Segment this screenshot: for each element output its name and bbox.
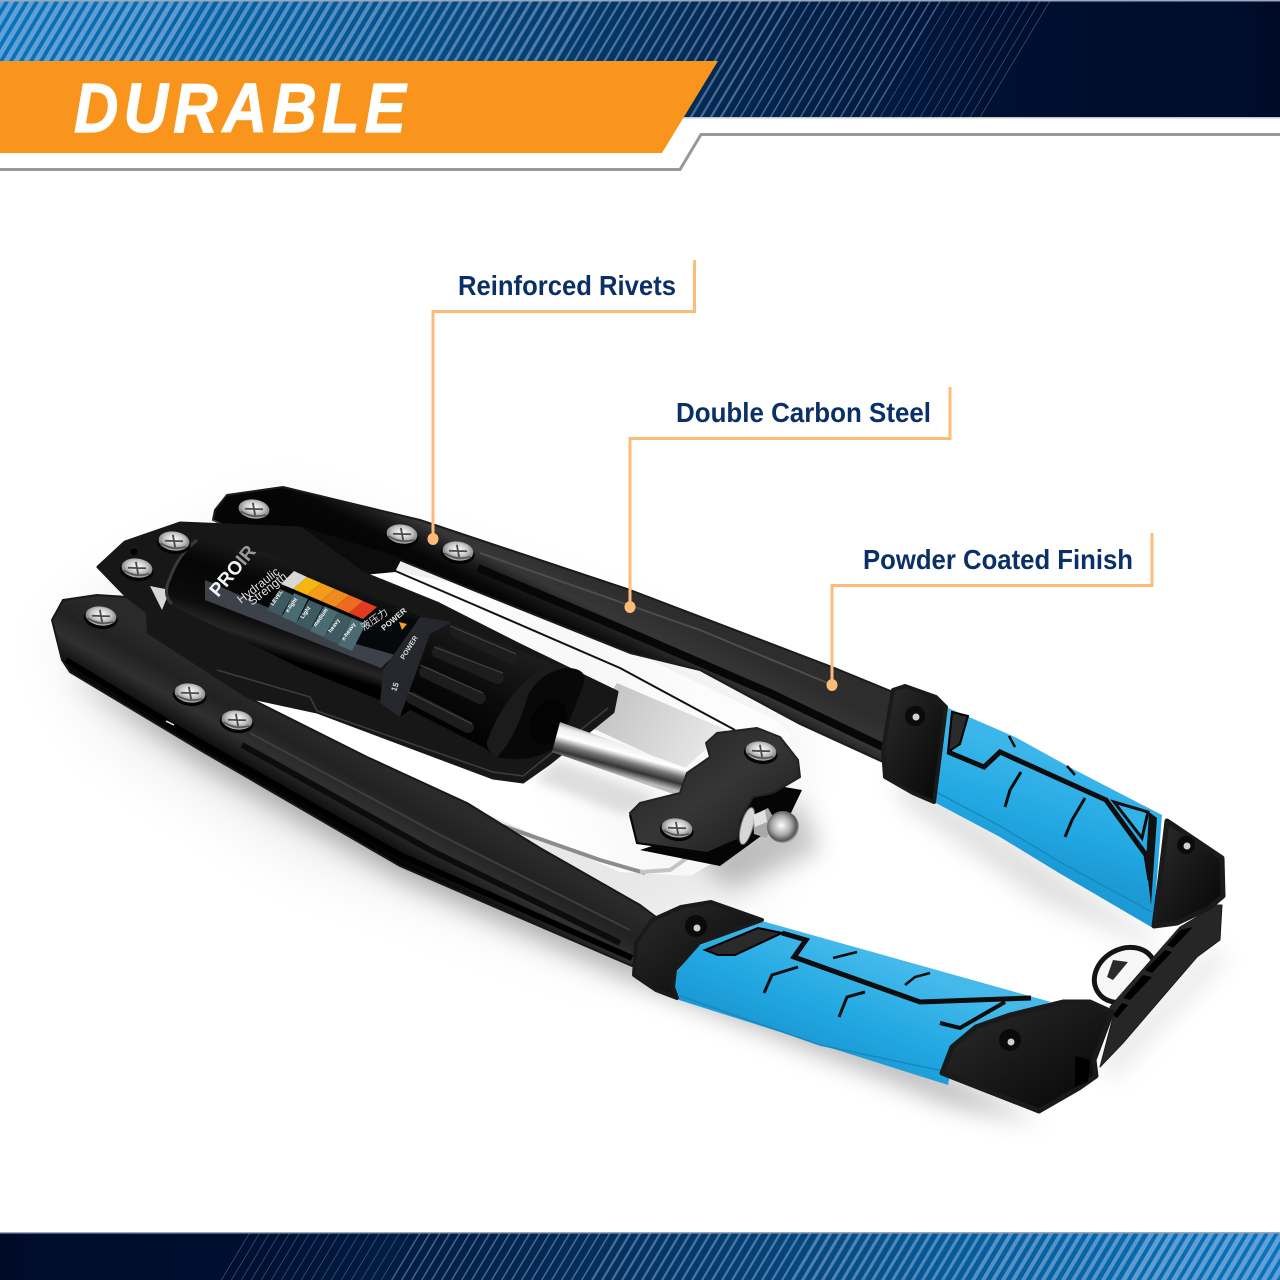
brand text: PROIR xyxy=(206,541,261,601)
label: Double Carbon Steel xyxy=(676,397,931,428)
plate hole xyxy=(130,548,138,556)
rivets xyxy=(82,497,779,843)
upper handle xyxy=(883,686,1223,928)
product name: Hydraulic xyxy=(234,565,282,606)
upper grip xyxy=(934,707,1162,928)
top header band xyxy=(0,0,1280,118)
chrome spring plate xyxy=(247,565,790,876)
product name second line: Strength xyxy=(245,569,290,608)
product: hydraulic strength trainer xyxy=(52,487,1225,1122)
label panel xyxy=(205,541,417,668)
hinge connector xyxy=(1084,905,1222,1067)
power pointer xyxy=(399,622,407,630)
grey header outline xyxy=(0,134,1280,170)
upper end cap xyxy=(1154,821,1223,926)
lower grip xyxy=(671,921,1051,1085)
lower end cap xyxy=(942,1002,1112,1111)
lower arm xyxy=(52,595,660,966)
title: DURABLE xyxy=(74,69,411,147)
upper inner cap xyxy=(883,686,946,802)
callout: powder coated finish xyxy=(826,533,1152,691)
callout: double carbon steel xyxy=(624,387,950,613)
power label: 液压力 xyxy=(358,606,390,633)
upper arm xyxy=(213,487,893,762)
piston rod xyxy=(552,722,692,797)
level cells: x-light xyxy=(285,597,299,614)
hook ring xyxy=(1084,936,1166,1014)
title banner xyxy=(0,61,718,153)
level cells: medium xyxy=(313,607,330,628)
hydraulic cylinder xyxy=(166,540,430,702)
power label english: POWER xyxy=(380,606,409,633)
adjustment knob xyxy=(380,617,585,759)
level cells xyxy=(267,589,366,651)
level cells: x-heavy xyxy=(341,621,358,642)
lower handle xyxy=(634,902,1112,1111)
bottom band xyxy=(0,1232,1280,1280)
band text: POWER xyxy=(400,635,420,661)
cylinder mounting plate xyxy=(98,523,617,782)
level cells: LEVEL xyxy=(270,589,285,607)
callout: reinforced rivets xyxy=(428,260,694,545)
colour scale xyxy=(281,571,377,619)
soft ground shadow xyxy=(60,510,1225,1122)
level cells: Light xyxy=(300,606,312,620)
label: Reinforced Rivets xyxy=(458,270,676,301)
level cells: heavy xyxy=(328,617,342,634)
lower inner cap xyxy=(634,902,762,998)
yoke bracket xyxy=(630,728,802,866)
dial number: 15 xyxy=(389,681,401,693)
label: Powder Coated Finish xyxy=(863,544,1133,575)
acorn nut xyxy=(736,806,799,846)
